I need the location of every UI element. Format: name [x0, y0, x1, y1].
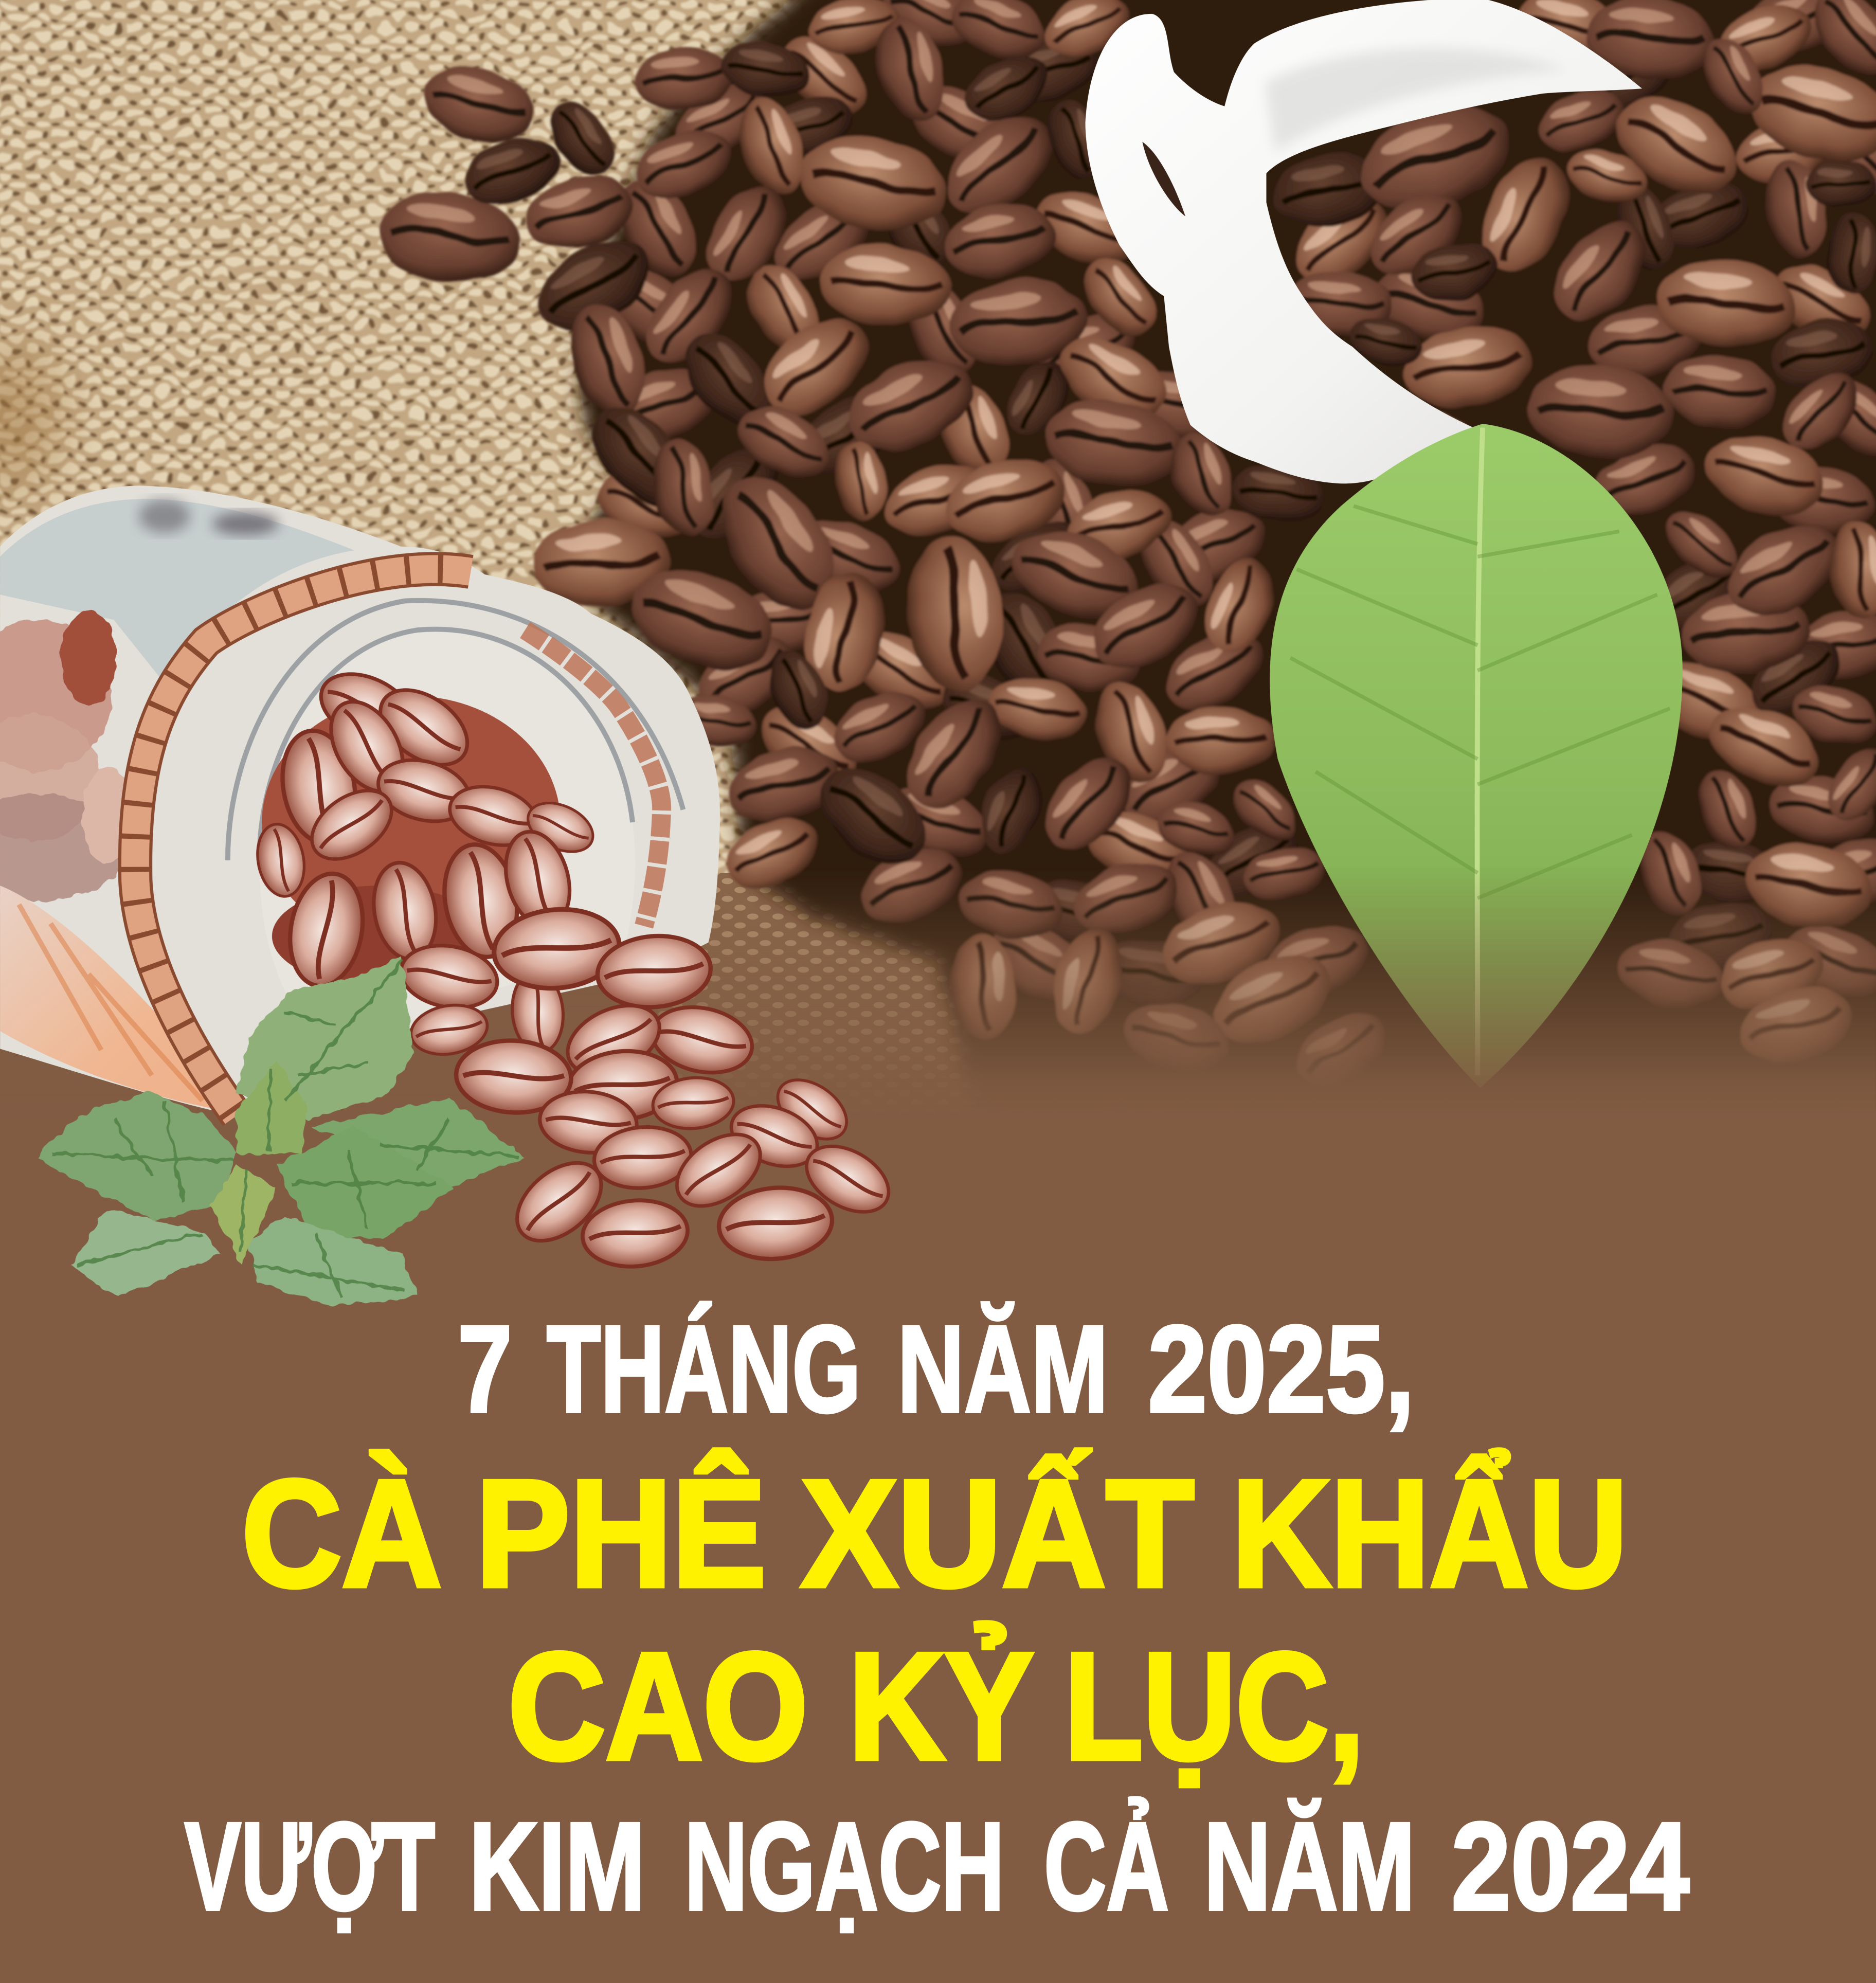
title line 1: 7 — [458, 1300, 512, 1438]
title line 4 — [185, 1797, 1689, 1936]
title line 2: XUẤT — [801, 1448, 1194, 1618]
burlap sack background — [0, 0, 1240, 1113]
leaf bottom — [248, 1216, 419, 1306]
jar glass — [0, 486, 720, 1116]
title line 2: CÀ — [242, 1448, 442, 1618]
beans seen through the jar side — [0, 610, 133, 901]
rope around jar neck — [135, 569, 471, 1116]
leaf top — [237, 957, 413, 1121]
leaf left — [35, 1091, 237, 1221]
beans inside the jar — [252, 660, 601, 992]
title line 3: CAO — [508, 1621, 808, 1791]
rope right side — [525, 630, 662, 926]
orange husk — [0, 886, 238, 1113]
title block — [185, 1300, 1689, 1936]
photo and illustration artwork — [0, 0, 1876, 1306]
fade of the photo into the brown panel — [0, 867, 1876, 1126]
title line 2 — [242, 1448, 1628, 1618]
title line 1: 2025, — [1148, 1300, 1415, 1438]
leaf centre top — [237, 1060, 308, 1154]
title line 4: KIM — [469, 1797, 645, 1936]
mint leaves — [35, 957, 525, 1306]
cup handle opening — [1142, 142, 1185, 217]
under layer of beans filling the gaps — [583, 0, 1876, 1016]
title line 4: NĂM — [1204, 1797, 1415, 1936]
green leaf — [1270, 424, 1683, 1088]
title line 4: NGẠCH — [684, 1797, 1004, 1936]
leaf centre lower — [210, 1165, 277, 1265]
title line 3: LỤC, — [1065, 1621, 1364, 1791]
beans inside and right of the cup — [1267, 145, 1390, 235]
white coffee cup — [1086, 0, 1642, 483]
leaf right — [313, 1098, 525, 1188]
spilled beans — [396, 904, 900, 1271]
jar mouth — [259, 629, 635, 1050]
leaf lower left — [71, 1210, 219, 1297]
main beans — [414, 56, 542, 154]
title line 4: CẢ — [1044, 1797, 1169, 1936]
watercolor jar of coffee beans — [0, 486, 900, 1306]
title line 1: THÁNG — [547, 1300, 861, 1438]
title line 3 — [508, 1621, 1364, 1791]
title line 2: KHẨU — [1232, 1448, 1628, 1618]
title line 2: PHÊ — [476, 1448, 766, 1618]
coffee bean pile photo — [373, 0, 1876, 1113]
title line 4: VƯỢT — [185, 1797, 435, 1936]
title line 1 — [458, 1300, 1415, 1438]
title line 4: 2024 — [1451, 1797, 1689, 1936]
title line 1: NĂM — [897, 1300, 1108, 1438]
title line 3: KỶ — [849, 1621, 1034, 1791]
leaf lower right — [277, 1126, 454, 1238]
